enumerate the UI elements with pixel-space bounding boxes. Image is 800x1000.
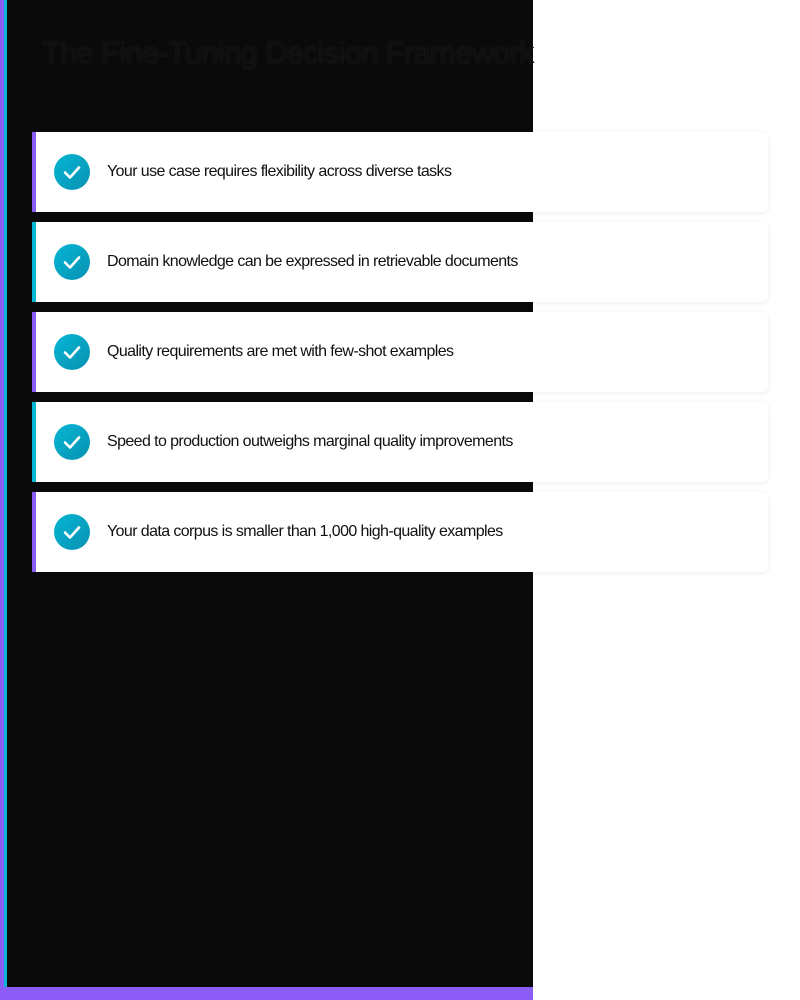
icon: check [54, 514, 90, 550]
card 4 [32, 402, 768, 482]
text: Domain knowledge can be expressed in retrievable documents [107, 253, 518, 270]
icon: check [54, 244, 90, 280]
text: Your use case requires flexibility across diverse tasks [107, 163, 451, 180]
card 3 [32, 312, 768, 392]
icon: check [54, 424, 90, 460]
bottom accent bar [0, 987, 533, 1000]
icon: check [54, 154, 90, 190]
text: Your data corpus is smaller than 1,000 high-quality examples [107, 523, 503, 540]
text: Speed to production outweighs marginal quality improvements [107, 433, 513, 450]
left accent stripe [0, 0, 4, 987]
card 1 [32, 132, 768, 212]
title: The Fine-Tuning Decision Framework [42, 35, 534, 70]
card 2 [32, 222, 768, 302]
text: Quality requirements are met with few-shot examples [107, 343, 453, 360]
icon: check [54, 334, 90, 370]
card 5 [32, 492, 768, 572]
dark background panel [0, 0, 533, 1000]
